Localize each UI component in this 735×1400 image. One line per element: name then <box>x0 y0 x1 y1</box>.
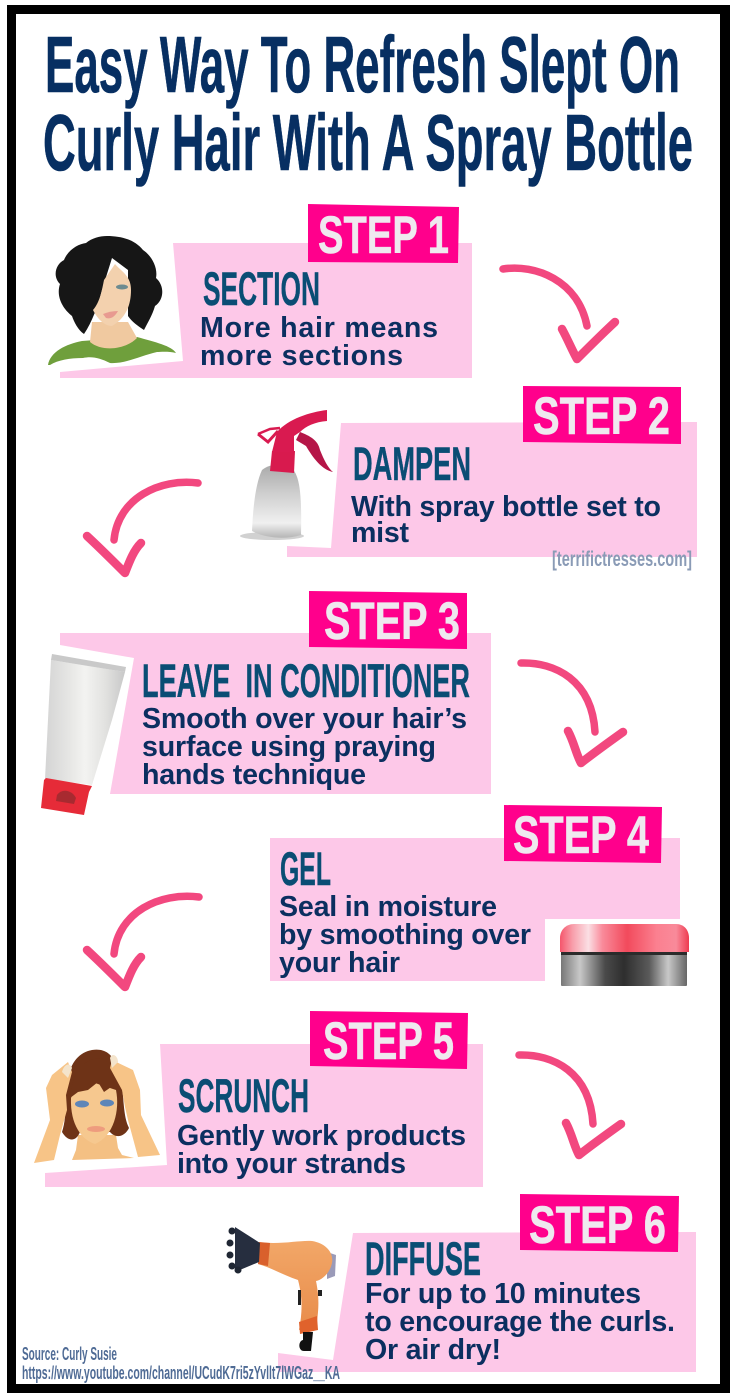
heading: dampen: DAMPEN <box>353 437 471 490</box>
body text: step 3: Smooth over your hair’s <box>142 703 467 735</box>
panel: step 5 scrunch <box>45 1011 483 1187</box>
arrow: step 3 to 4 <box>521 663 623 763</box>
source credit: Source: Curly Susie <box>22 1344 117 1364</box>
body text: step 3: surface using praying <box>142 731 436 763</box>
body text: step 1 <box>200 312 438 372</box>
body text: step 5 <box>177 1120 466 1180</box>
icon: conditioner tube <box>41 654 126 815</box>
panel: step 4 gel <box>270 805 680 981</box>
icon: spray bottle <box>240 410 333 540</box>
source credit: https://www.youtube.com/channel/UCudK7ri5zYvllt7lWGaz__KA <box>22 1363 340 1383</box>
step 6 badge: STEP 6 <box>529 1196 666 1255</box>
panel: step 3 leave in conditioner <box>60 591 491 794</box>
arrow: step 4 to 5 <box>87 896 199 987</box>
arrow: step 2 to 3 <box>87 482 198 573</box>
body text: step 4: your hair <box>279 947 400 979</box>
icon: curly haired woman <box>48 236 176 365</box>
body text: step 6: Or air dry! <box>365 1334 501 1366</box>
body text: step 3: hands technique <box>142 759 366 791</box>
title <box>43 20 693 187</box>
step 4 badge: STEP 4 <box>513 806 649 865</box>
source credit <box>22 1344 340 1383</box>
body text: step 4: by smoothing over <box>279 919 531 951</box>
step 1 badge: STEP 1 <box>318 206 449 265</box>
body text: step 5: into your strands <box>177 1148 406 1180</box>
arrow: step 1 to 2 <box>503 268 615 359</box>
panel: step 1 section <box>60 204 472 378</box>
step 3 badge: STEP 3 <box>324 592 460 651</box>
body text: step 6: to encourage the curls. <box>365 1306 675 1338</box>
body text: step 2 <box>351 491 661 549</box>
heading: diffuse: DIFFUSE <box>365 1232 481 1285</box>
body text: step 5: Gently work products <box>177 1120 466 1152</box>
step 5 badge: STEP 5 <box>323 1012 454 1071</box>
body text: step 2: mist <box>351 517 409 549</box>
arrow: step 5 to 6 <box>519 1055 621 1155</box>
body text: step 3 <box>142 703 467 791</box>
heading: scrunch: SCRUNCH <box>178 1069 309 1122</box>
body text: step 1: more sections <box>200 340 403 372</box>
icon: gel jar <box>560 924 689 986</box>
panel: step 2 dampen <box>287 386 697 571</box>
heading: gel: GEL <box>280 842 331 895</box>
body text: step 6 <box>365 1278 675 1366</box>
heading: leave in conditioner: LEAVE IN CONDITIONER <box>142 654 470 707</box>
body text: step 2: With spray bottle set to <box>351 491 661 523</box>
heading: section: SECTION <box>203 262 320 315</box>
body text: step 4: Seal in moisture <box>279 891 497 923</box>
icon: hair dryer <box>226 1227 336 1351</box>
step 2 badge: STEP 2 <box>533 387 670 446</box>
icon: woman scrunching hair <box>34 1050 160 1163</box>
panel: step 6 diffuse <box>278 1194 696 1372</box>
body text: step 1: More hair means <box>200 312 438 344</box>
body text: step 6: For up to 10 minutes <box>365 1278 641 1310</box>
body text: step 4 <box>279 891 531 979</box>
